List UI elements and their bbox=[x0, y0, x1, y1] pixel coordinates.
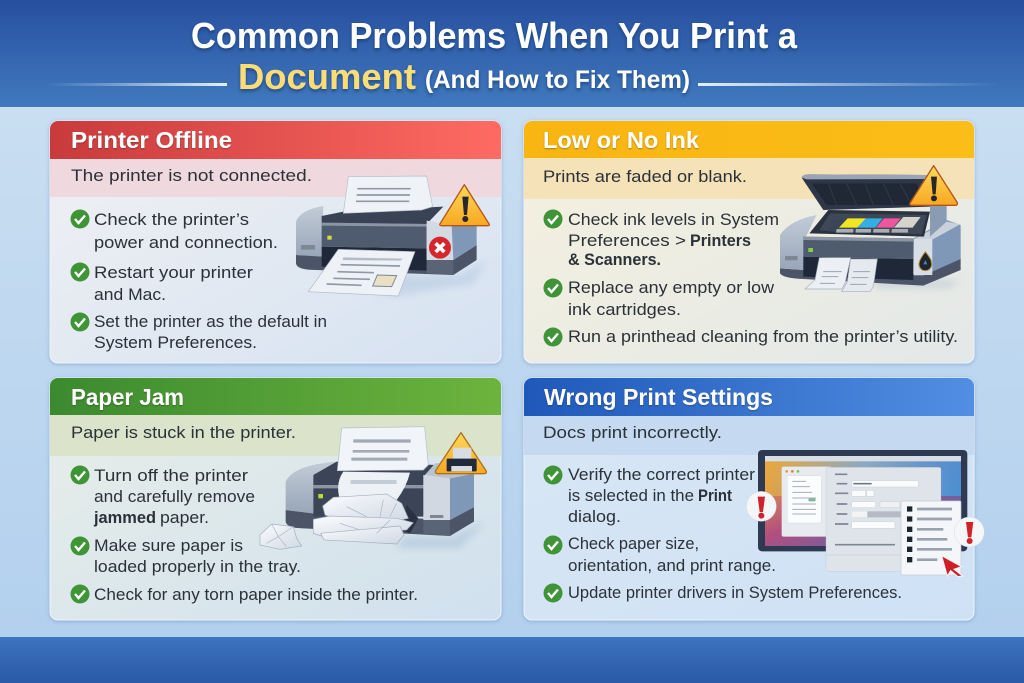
fix list: Verify the correct printer bbox=[568, 466, 756, 484]
title: (And How to Fix Them) bbox=[425, 66, 690, 94]
fix list: ink cartridges. bbox=[568, 301, 681, 319]
panel: paper jam bbox=[50, 378, 501, 620]
fix list: and Mac. bbox=[94, 286, 166, 304]
fix list: & Scanners. bbox=[568, 251, 661, 269]
heading: low or no ink bbox=[524, 121, 974, 158]
heading: wrong print settings bbox=[524, 378, 974, 416]
fix list bbox=[70, 466, 418, 604]
fix list: Replace any empty or low bbox=[568, 279, 774, 297]
icon: alert left bbox=[746, 491, 776, 521]
symptom band: Docs print incorrectly. bbox=[543, 423, 722, 442]
fix list: Print bbox=[698, 487, 732, 505]
illustration: ink printer bbox=[780, 166, 970, 292]
fix list bbox=[70, 210, 327, 352]
header banner bbox=[0, 0, 1024, 107]
fix list: Make sure paper is bbox=[94, 537, 243, 555]
heading: printer offline: Printer Offline bbox=[71, 127, 232, 153]
fix list: paper. bbox=[160, 509, 209, 527]
illustration: print dialog on monitor bbox=[746, 450, 984, 577]
fix list: is selected in the bbox=[568, 487, 694, 505]
fix list: Preferences > bbox=[568, 232, 686, 250]
heading: printer offline bbox=[50, 121, 501, 159]
fix list: loaded properly in the tray. bbox=[94, 558, 301, 576]
footer band bbox=[0, 637, 1024, 683]
heading: paper jam: Paper Jam bbox=[71, 384, 184, 410]
fix list: Turn off the printer bbox=[94, 467, 249, 485]
fix list bbox=[544, 210, 958, 346]
title: Common Problems When You Print a bbox=[191, 15, 798, 56]
fix list: Set the printer as the default in bbox=[94, 313, 327, 331]
fix list: Check for any torn paper inside the printer. bbox=[94, 586, 418, 604]
icon: warning triangle bbox=[910, 166, 957, 205]
fix list: Check paper size, bbox=[568, 535, 699, 553]
page body background bbox=[0, 107, 1024, 637]
symptom band: Prints are faded or blank. bbox=[543, 167, 747, 186]
fix list: jammed bbox=[93, 509, 156, 527]
fix list: Run a printhead cleaning from the printer’s utility. bbox=[568, 328, 958, 346]
symptom band: Paper is stuck in the printer. bbox=[71, 423, 296, 442]
fix list: dialog. bbox=[568, 508, 621, 526]
fix list: Check the printer’s bbox=[94, 211, 249, 229]
icon: warning triangle bbox=[440, 185, 489, 226]
fix list: System Preferences. bbox=[94, 334, 257, 352]
symptom band bbox=[50, 159, 501, 197]
symptom band bbox=[524, 416, 974, 455]
icon: cursor arrow bbox=[942, 556, 963, 577]
panel: printer offline bbox=[50, 121, 501, 363]
illustration: offline printer bbox=[296, 176, 489, 297]
fix list bbox=[544, 466, 902, 602]
icon: alert right bbox=[954, 517, 984, 547]
symptom band bbox=[524, 158, 974, 199]
fix list: Update printer drivers in System Preferences. bbox=[568, 584, 902, 602]
symptom band bbox=[50, 415, 501, 456]
heading: paper jam bbox=[50, 378, 501, 415]
heading: low or no ink: Low or No Ink bbox=[543, 127, 699, 153]
title: Document bbox=[238, 56, 416, 97]
panel: low or no ink bbox=[524, 121, 974, 363]
fix list: power and connection. bbox=[94, 234, 278, 252]
icon: warning with printer bbox=[435, 433, 486, 474]
heading: wrong print settings: Wrong Print Settings bbox=[544, 384, 773, 410]
symptom band: The printer is not connected. bbox=[71, 166, 312, 185]
fix list: Printers bbox=[690, 232, 751, 250]
title bbox=[191, 15, 798, 97]
fix list: and carefully remove bbox=[94, 488, 255, 506]
fix list: orientation, and print range. bbox=[568, 557, 776, 575]
illustration: jammed printer bbox=[260, 427, 487, 549]
panel: wrong print settings bbox=[524, 378, 984, 620]
fix list: Restart your printer bbox=[94, 264, 254, 282]
fix list: Check ink levels in System bbox=[568, 211, 779, 229]
